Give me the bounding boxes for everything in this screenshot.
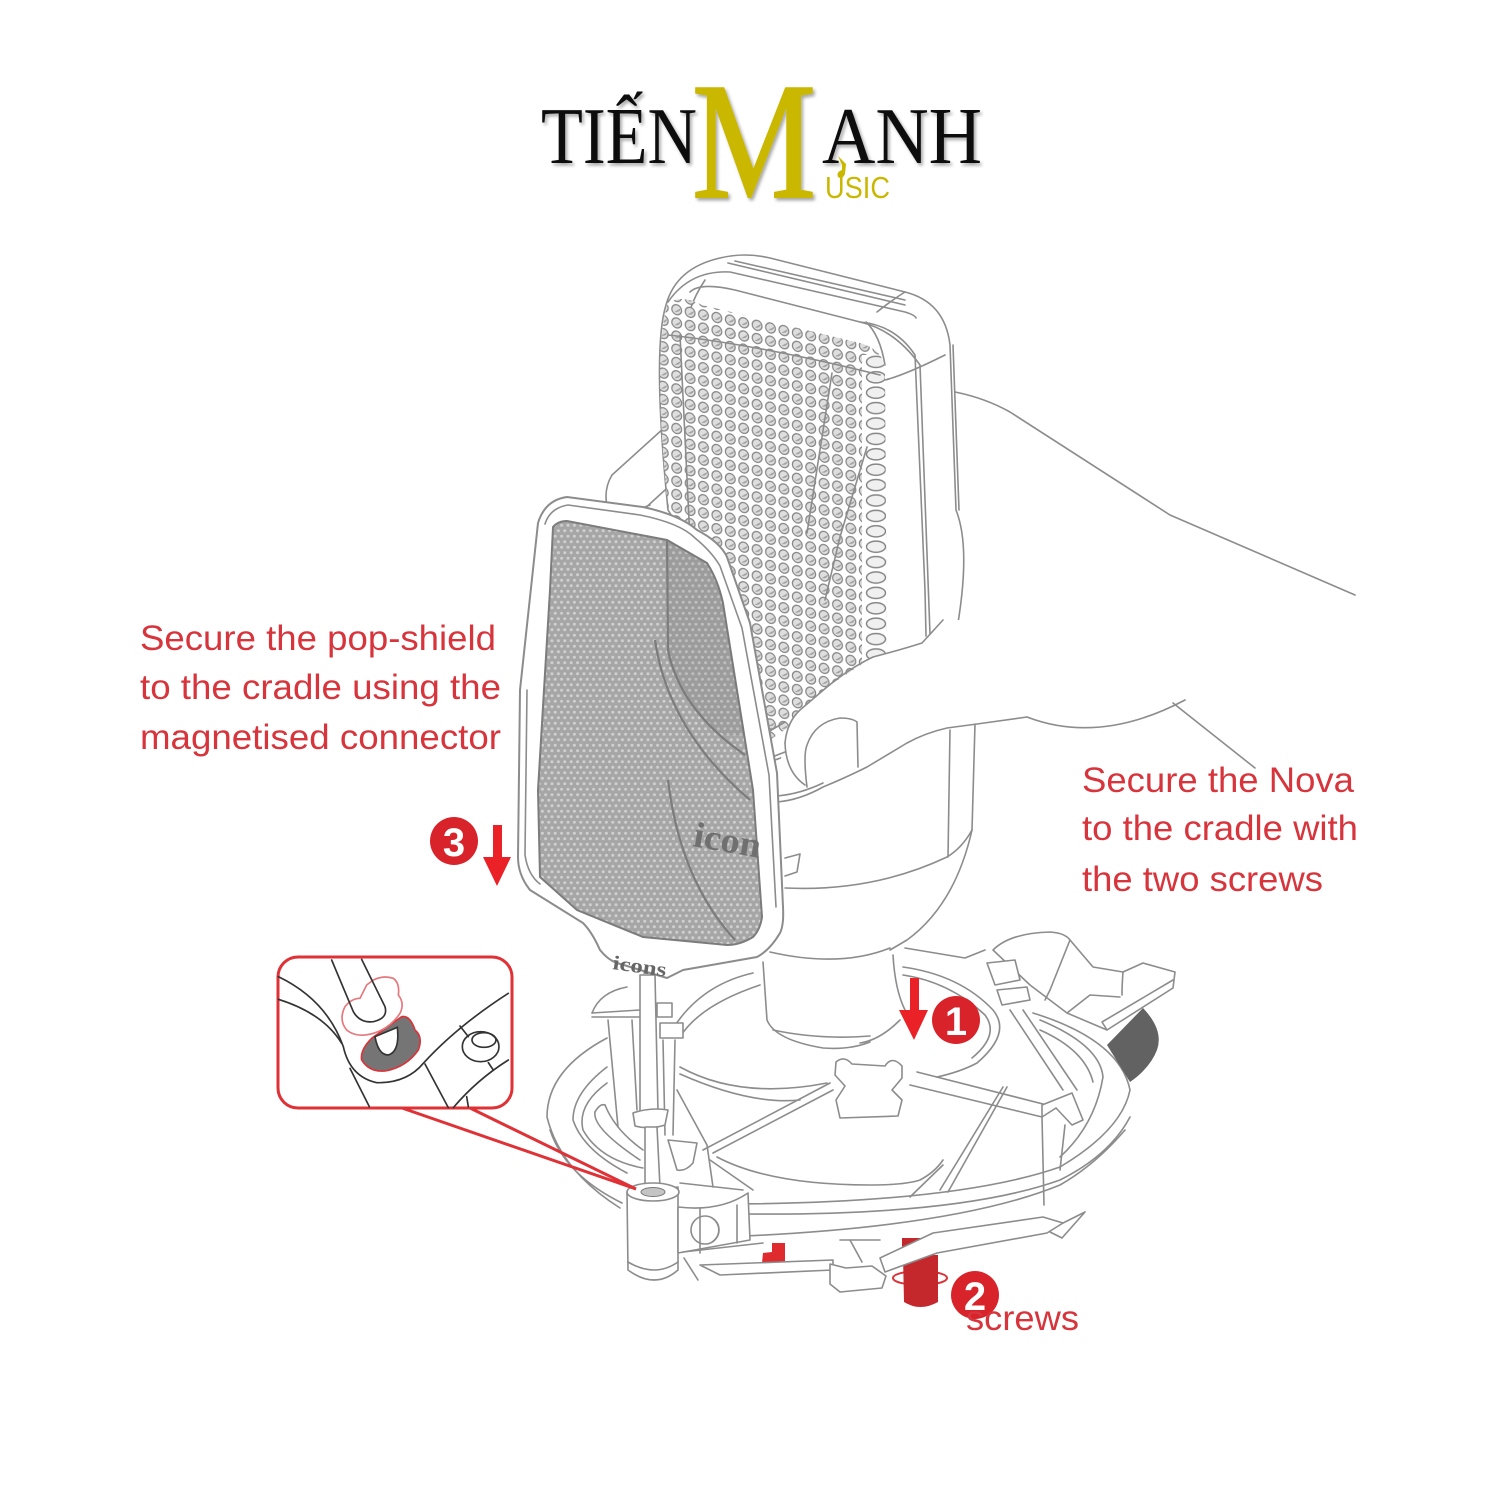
head to wrist line — [1027, 700, 1185, 728]
caption: pop-shield: magnetised connector — [140, 717, 501, 757]
body bottom edge — [770, 948, 890, 959]
pop shield outer frame — [518, 497, 783, 978]
step 1 arrow — [899, 978, 928, 1040]
body logo trailing glyph — [785, 854, 800, 876]
pop shield — [518, 497, 783, 982]
pop shield mesh — [538, 521, 762, 945]
caption: secure the Nova: the two screws — [1082, 859, 1323, 899]
inset: magnet connector detail — [278, 957, 512, 1108]
logo music note — [838, 156, 846, 178]
logo large gold M: M — [692, 49, 816, 233]
logo gold USIC: USIC — [825, 170, 890, 205]
caption: secure the Nova: to the cradle with — [1082, 808, 1358, 848]
logo wordmark: ANH: ANH — [822, 93, 982, 181]
front left cylinder post — [627, 1183, 679, 1280]
left rear spring tube — [595, 1105, 643, 1160]
microphone grille and head — [650, 255, 964, 760]
caption: secure the Nova: Secure the Nova — [1082, 760, 1354, 800]
screw: right red — [893, 1238, 947, 1307]
right strut end cap — [1042, 1093, 1083, 1125]
thimble left — [668, 1140, 697, 1170]
microphone head outer shell — [659, 255, 964, 760]
front connector block — [678, 1193, 750, 1253]
hand and body white mask — [755, 620, 1027, 965]
body lower curve — [890, 830, 972, 950]
microphone logo seen through mesh: icon — [691, 814, 765, 866]
inset drawing — [278, 959, 508, 1108]
step 3 badge: 3 — [443, 821, 465, 865]
step 1 badge: 1 — [945, 1000, 967, 1044]
thumb tip — [785, 743, 805, 785]
clamp body — [993, 932, 1175, 1030]
head shell edge lines — [668, 261, 959, 636]
caption: pop-shield — [140, 618, 501, 757]
grille perforations — [660, 299, 887, 739]
lower spider struts and clip — [683, 1212, 1085, 1292]
mic base cone — [677, 1090, 943, 1197]
shock mount cradle — [547, 932, 1175, 1307]
hand outline behind microphone — [605, 392, 1355, 768]
leader lines from inset to connector — [402, 1108, 636, 1189]
small band — [772, 752, 785, 757]
logo: Tiến Mạnh Music — [541, 49, 982, 233]
step 1 marker — [899, 978, 980, 1044]
left rear post — [592, 987, 675, 1135]
step 2 badge — [951, 1271, 999, 1319]
body vertical seams — [948, 724, 975, 857]
logo wordmark: TIẾN: TIẾN — [541, 91, 697, 181]
thumb underside — [777, 717, 1027, 802]
clamp knob — [1107, 1008, 1159, 1082]
step 2 badge: 2 — [964, 1275, 986, 1319]
step 3 marker — [430, 817, 511, 886]
screw: left red — [762, 1243, 785, 1263]
thumb nail — [805, 718, 858, 787]
clamp nuts — [987, 960, 1020, 985]
cradle back ring — [672, 948, 1000, 1101]
body band — [785, 830, 972, 888]
pop shield branding: icons — [611, 952, 668, 982]
grille contour lines — [668, 335, 880, 600]
rear nuts — [657, 1003, 683, 1038]
caption: pop-shield: to the cradle using the — [140, 667, 501, 707]
front ring band — [547, 1013, 1130, 1236]
caption: pop-shield: Secure the pop-shield — [140, 618, 496, 658]
spider struts — [703, 1010, 1077, 1205]
step 3 arrow — [483, 825, 511, 886]
inset frame — [278, 957, 512, 1108]
microphone neck — [763, 955, 905, 1048]
microphone seen through mesh — [655, 540, 750, 940]
microphone lower body with thumb — [755, 620, 1185, 965]
centre elastic clip — [835, 1059, 902, 1118]
caption: secure the Nova — [1082, 760, 1358, 899]
pop shield support rod — [633, 975, 668, 1187]
caption: screws: screws — [966, 1298, 1079, 1338]
clamp assembly right — [987, 932, 1175, 1082]
back of hand edge — [768, 620, 943, 743]
